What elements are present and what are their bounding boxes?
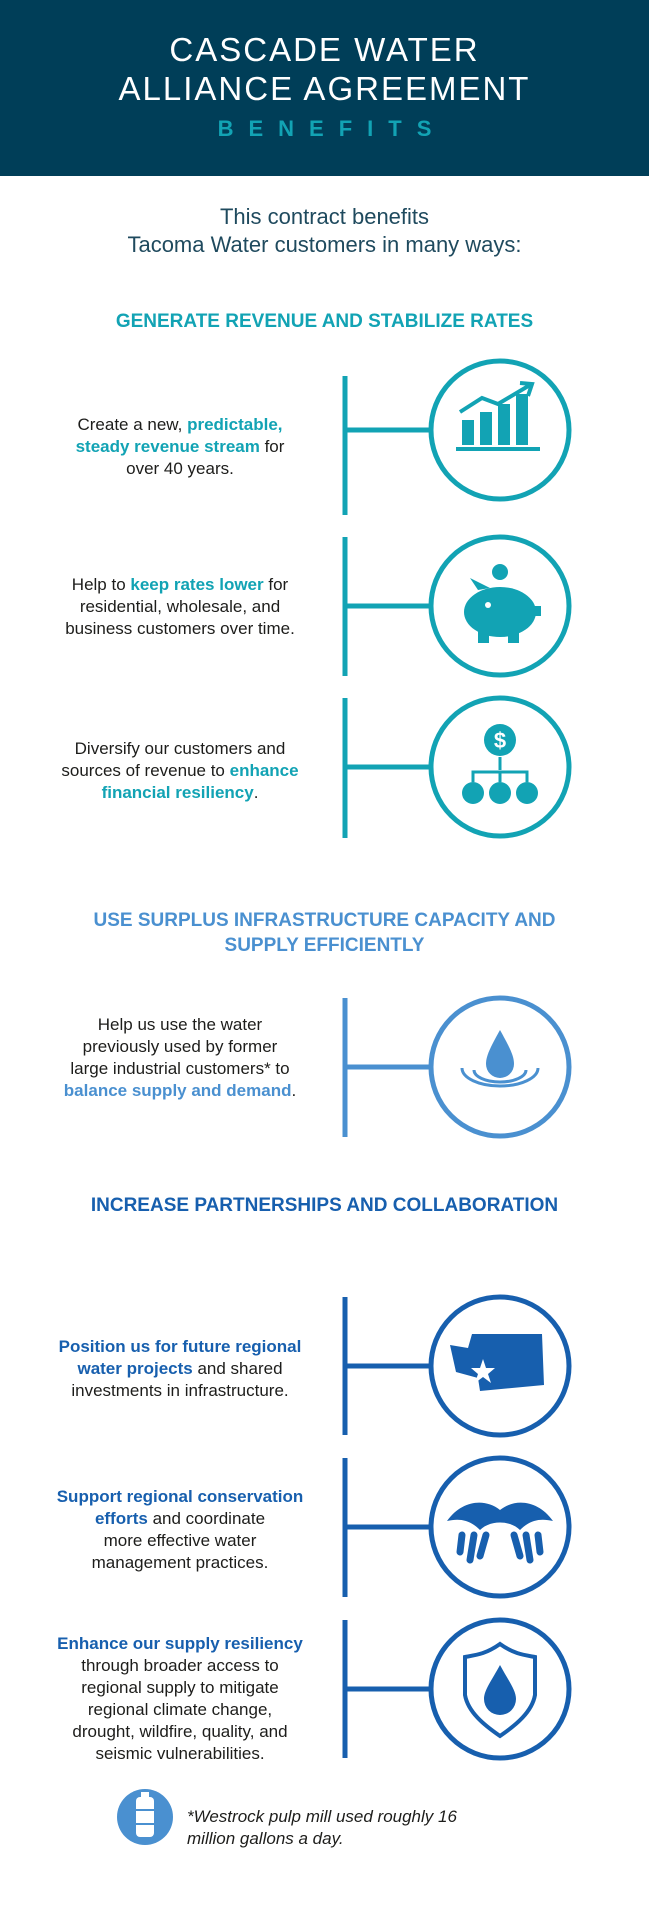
text: diversify: financial resiliency. <box>102 783 258 802</box>
text: diversify: Diversify our customers and <box>75 739 285 758</box>
text: diversify: sources of revenue to enhance <box>61 761 299 780</box>
text: supply resiliency: regional supply to mitigate <box>81 1678 279 1697</box>
header banner <box>0 0 649 176</box>
text: balance supply: previously used by former <box>83 1037 277 1056</box>
icon row: hands <box>345 1458 569 1597</box>
text: revenue stream <box>76 415 284 478</box>
footnote: *Westrock pulp mill used roughly 16 <box>187 1807 457 1826</box>
heading: partnerships: INCREASE PARTNERSHIPS AND COLLABORATION <box>91 1195 558 1216</box>
text: rates lower <box>65 575 295 638</box>
text: balance supply: balance supply and demand. <box>64 1081 296 1100</box>
text: regional projects: water projects and shared <box>77 1359 283 1378</box>
footnote: million gallons a day. <box>187 1829 344 1848</box>
icon row: dollar network <box>345 698 569 838</box>
text: rates lower: Help to keep rates lower for <box>72 575 288 594</box>
icon row: chart <box>345 361 569 515</box>
text: supply resiliency: through broader access to <box>81 1656 279 1675</box>
text: conservation <box>57 1487 303 1572</box>
heading: surplus: SUPPLY EFFICIENTLY <box>225 935 424 956</box>
text: balance supply <box>64 1015 296 1100</box>
text: revenue stream: steady revenue stream for <box>76 437 284 456</box>
heading: surplus: USE SURPLUS INFRASTRUCTURE CAPACITY AND <box>93 910 556 931</box>
text: supply resiliency <box>57 1634 303 1763</box>
icon row: dollar network: $ <box>494 728 506 753</box>
intro text: Tacoma Water customers in many ways: <box>127 232 522 257</box>
icon: water jug <box>117 1789 173 1845</box>
icon row: water drop <box>345 998 569 1137</box>
text: diversify <box>61 739 299 802</box>
footnote <box>187 1807 457 1848</box>
text: conservation: management practices. <box>92 1553 268 1572</box>
text: conservation: Support regional conservation <box>57 1487 303 1506</box>
text: regional projects: investments in infrastructure. <box>71 1381 289 1400</box>
text: revenue stream: Create a new, predictable, <box>77 415 283 434</box>
text: revenue stream: over 40 years. <box>126 459 234 478</box>
text: regional projects: Position us for future regional <box>59 1337 301 1356</box>
text: supply resiliency: Enhance our supply resiliency <box>57 1634 303 1653</box>
text: balance supply: Help us use the water <box>98 1015 262 1034</box>
title: ALLIANCE AGREEMENT <box>119 70 530 107</box>
text: supply resiliency: seismic vulnerabilities. <box>95 1744 265 1763</box>
icon row: shield <box>345 1620 569 1758</box>
heading: surplus <box>93 910 556 956</box>
text: supply resiliency: regional climate change, <box>88 1700 272 1719</box>
text: regional projects <box>59 1337 301 1400</box>
icon row: washington <box>345 1297 569 1435</box>
intro text: This contract benefits <box>220 204 429 229</box>
text: rates lower: residential, wholesale, and <box>80 597 280 616</box>
text: supply resiliency: drought, wildfire, quality, and <box>72 1722 288 1741</box>
heading: generate revenue: GENERATE REVENUE AND STABILIZE RATES <box>116 311 533 332</box>
title: CASCADE WATER <box>169 31 480 68</box>
text: conservation: more effective water <box>104 1531 256 1550</box>
subtitle: BENEFITS <box>218 116 446 141</box>
icon row: piggy <box>345 537 569 676</box>
text: rates lower: business customers over time. <box>65 619 295 638</box>
intro text <box>127 204 522 257</box>
text: balance supply: large industrial customers* to <box>70 1059 290 1078</box>
title <box>118 31 530 107</box>
text: conservation: efforts and coordinate <box>95 1509 265 1528</box>
